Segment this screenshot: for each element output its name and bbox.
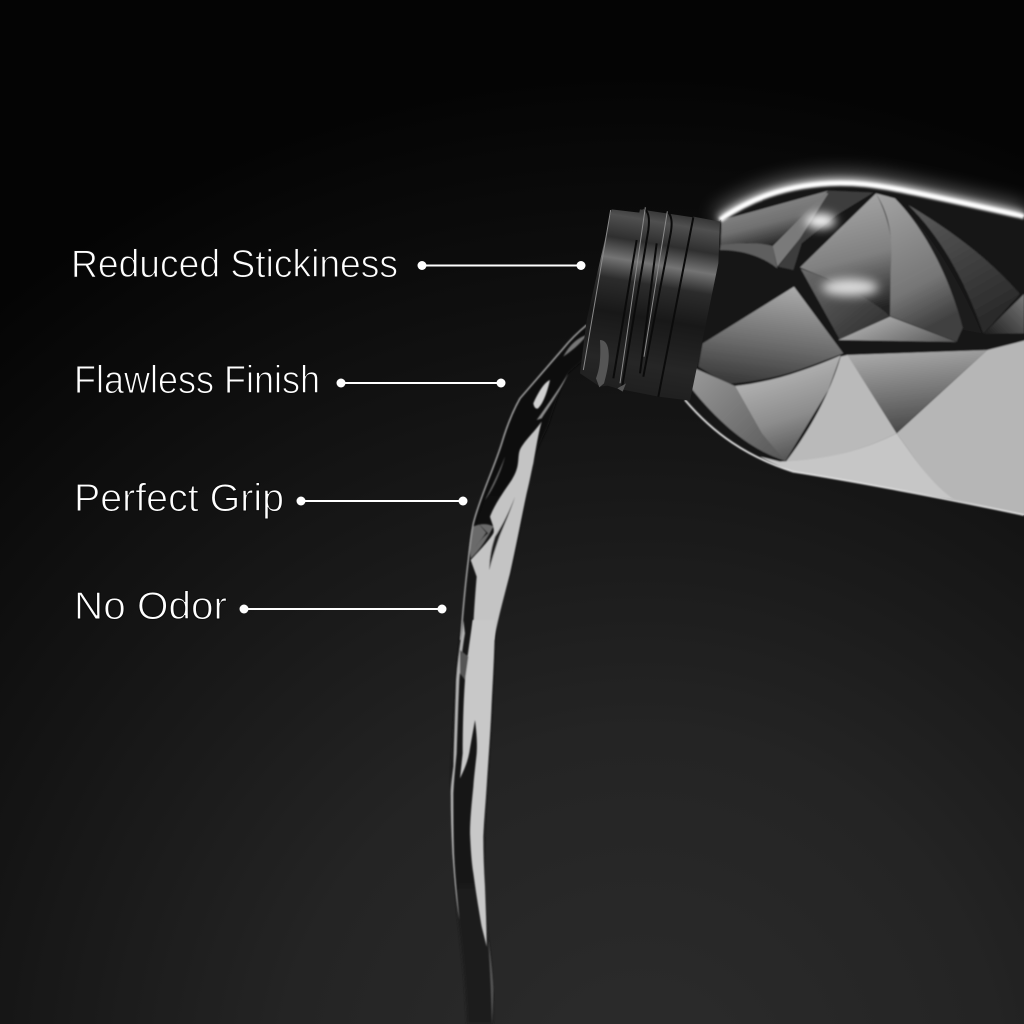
small light facet: [838, 317, 957, 342]
stream body: [451, 323, 587, 1024]
label: Flawless Finish: [74, 359, 506, 402]
top reflection band: [778, 191, 873, 270]
label: Flawless Finish: Flawless Finish: [74, 359, 320, 402]
water stream: [451, 323, 587, 1024]
bottom left facet: [690, 368, 785, 461]
specular highlight top: [805, 214, 836, 228]
horizontal dark band: [837, 341, 993, 354]
specular highlight middle: [822, 279, 878, 296]
left band facet: [720, 243, 777, 268]
left large facet: [698, 287, 843, 384]
label: Perfect Grip: Perfect Grip: [74, 477, 284, 520]
stream highlights, upper: [461, 325, 587, 640]
center dark facet: [801, 269, 890, 340]
label: Reduced Stickiness: [71, 243, 586, 286]
bottom rim: [685, 400, 1024, 515]
right big facet: [897, 340, 1024, 517]
lower middle facet: [786, 355, 897, 462]
dark strip: [932, 248, 964, 326]
bright top rim: [720, 183, 1024, 220]
label: Reduced Stickiness: Reduced Stickiness: [71, 243, 398, 286]
cap: [580, 207, 720, 401]
cap left ring: [580, 207, 650, 387]
right light facet: [876, 193, 963, 342]
center light facet: [800, 193, 893, 315]
upper left facet: [721, 191, 828, 246]
cap edge highlights: [583, 207, 667, 383]
thread lines: [613, 207, 693, 397]
cap right ring: [658, 217, 720, 401]
bottle outer glow: [720, 183, 1024, 220]
label: No Odor: [74, 585, 446, 628]
label: No Odor: No Odor: [74, 585, 227, 628]
lower center facet: [847, 350, 987, 433]
bottle: [580, 180, 1024, 517]
bottle tight glow: [720, 183, 1024, 220]
label: Perfect Grip: [74, 477, 468, 520]
cap grooved middle: [600, 209, 693, 397]
cap drips: [596, 340, 626, 392]
lower left facet: [735, 355, 841, 462]
body base: [680, 180, 1024, 517]
bottom band facet: [760, 433, 955, 500]
bottle body with facets: [680, 180, 1024, 517]
far right facet: [983, 294, 1024, 334]
stream highlights, lower: [451, 620, 495, 1024]
